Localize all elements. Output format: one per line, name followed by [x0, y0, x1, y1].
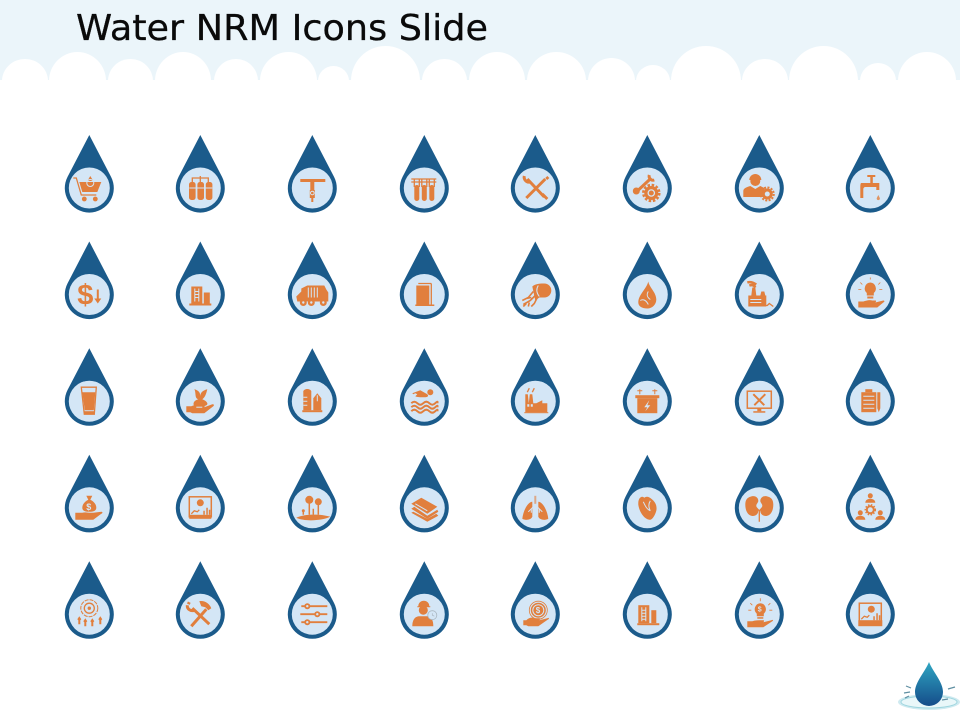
icon: water filters: [176, 135, 225, 213]
icon: garbage truck: [288, 242, 337, 319]
icon: dollar down: $: [77, 280, 93, 312]
icon: team around gear: [846, 455, 895, 532]
icon: wrench and gear: [623, 135, 672, 213]
icon: stacked layers: [400, 455, 449, 532]
icon: lungs: [511, 455, 560, 532]
title: Water NRM Icons Slide: [76, 8, 488, 49]
icon: trees on ground: [288, 455, 337, 532]
icon: monitor with tools: [735, 348, 784, 426]
icon: drinking glass: [65, 348, 114, 426]
icon: pipe valve: [288, 135, 337, 213]
icon: idea in hand: [846, 242, 895, 319]
icon: clipboard: [846, 348, 895, 426]
icon: swimmer: [400, 348, 449, 426]
icon: buildings: [176, 242, 225, 319]
icon: plant in hand: [176, 348, 225, 426]
icon: silo tanks: [288, 348, 337, 426]
icon: test tubes: [400, 135, 449, 213]
header band with cloud edge: [0, 0, 960, 116]
icon: crossed tools: [511, 135, 560, 213]
icon: tall buildings: [623, 561, 672, 639]
icon: wrench and hammer: [176, 561, 225, 639]
icon: engineer with gear: [735, 135, 784, 213]
icon: money bag in hand: $: [86, 502, 91, 512]
icon: battery: [623, 348, 672, 426]
icon: worker with clock: [400, 561, 449, 639]
icon: dollar idea in hand: [735, 561, 784, 639]
icon: dollar down: [65, 242, 114, 319]
icon: target with people: [65, 561, 114, 639]
icon: kidneys: [735, 455, 784, 532]
icon: chart board: [176, 455, 225, 532]
icon: industrial factory: [511, 348, 560, 426]
icon: water flame: [623, 242, 672, 319]
icon: coin in hand: [511, 561, 560, 639]
icon: sliders: [288, 561, 337, 639]
icon: heart organ: [623, 455, 672, 532]
icon: factory waste: [735, 242, 784, 319]
icon: water tap: [846, 135, 895, 213]
icon: dollar idea in hand: $: [758, 607, 762, 614]
icon: storage tank: [400, 242, 449, 319]
icon: shopping cart: [65, 135, 114, 213]
icon: coin in hand: $: [536, 606, 541, 615]
icon: money bag in hand: [65, 455, 114, 532]
logo: water drop with splash: [898, 662, 960, 710]
icon: pipe pouring water: [511, 242, 560, 319]
icon: chart board large: [846, 561, 895, 639]
